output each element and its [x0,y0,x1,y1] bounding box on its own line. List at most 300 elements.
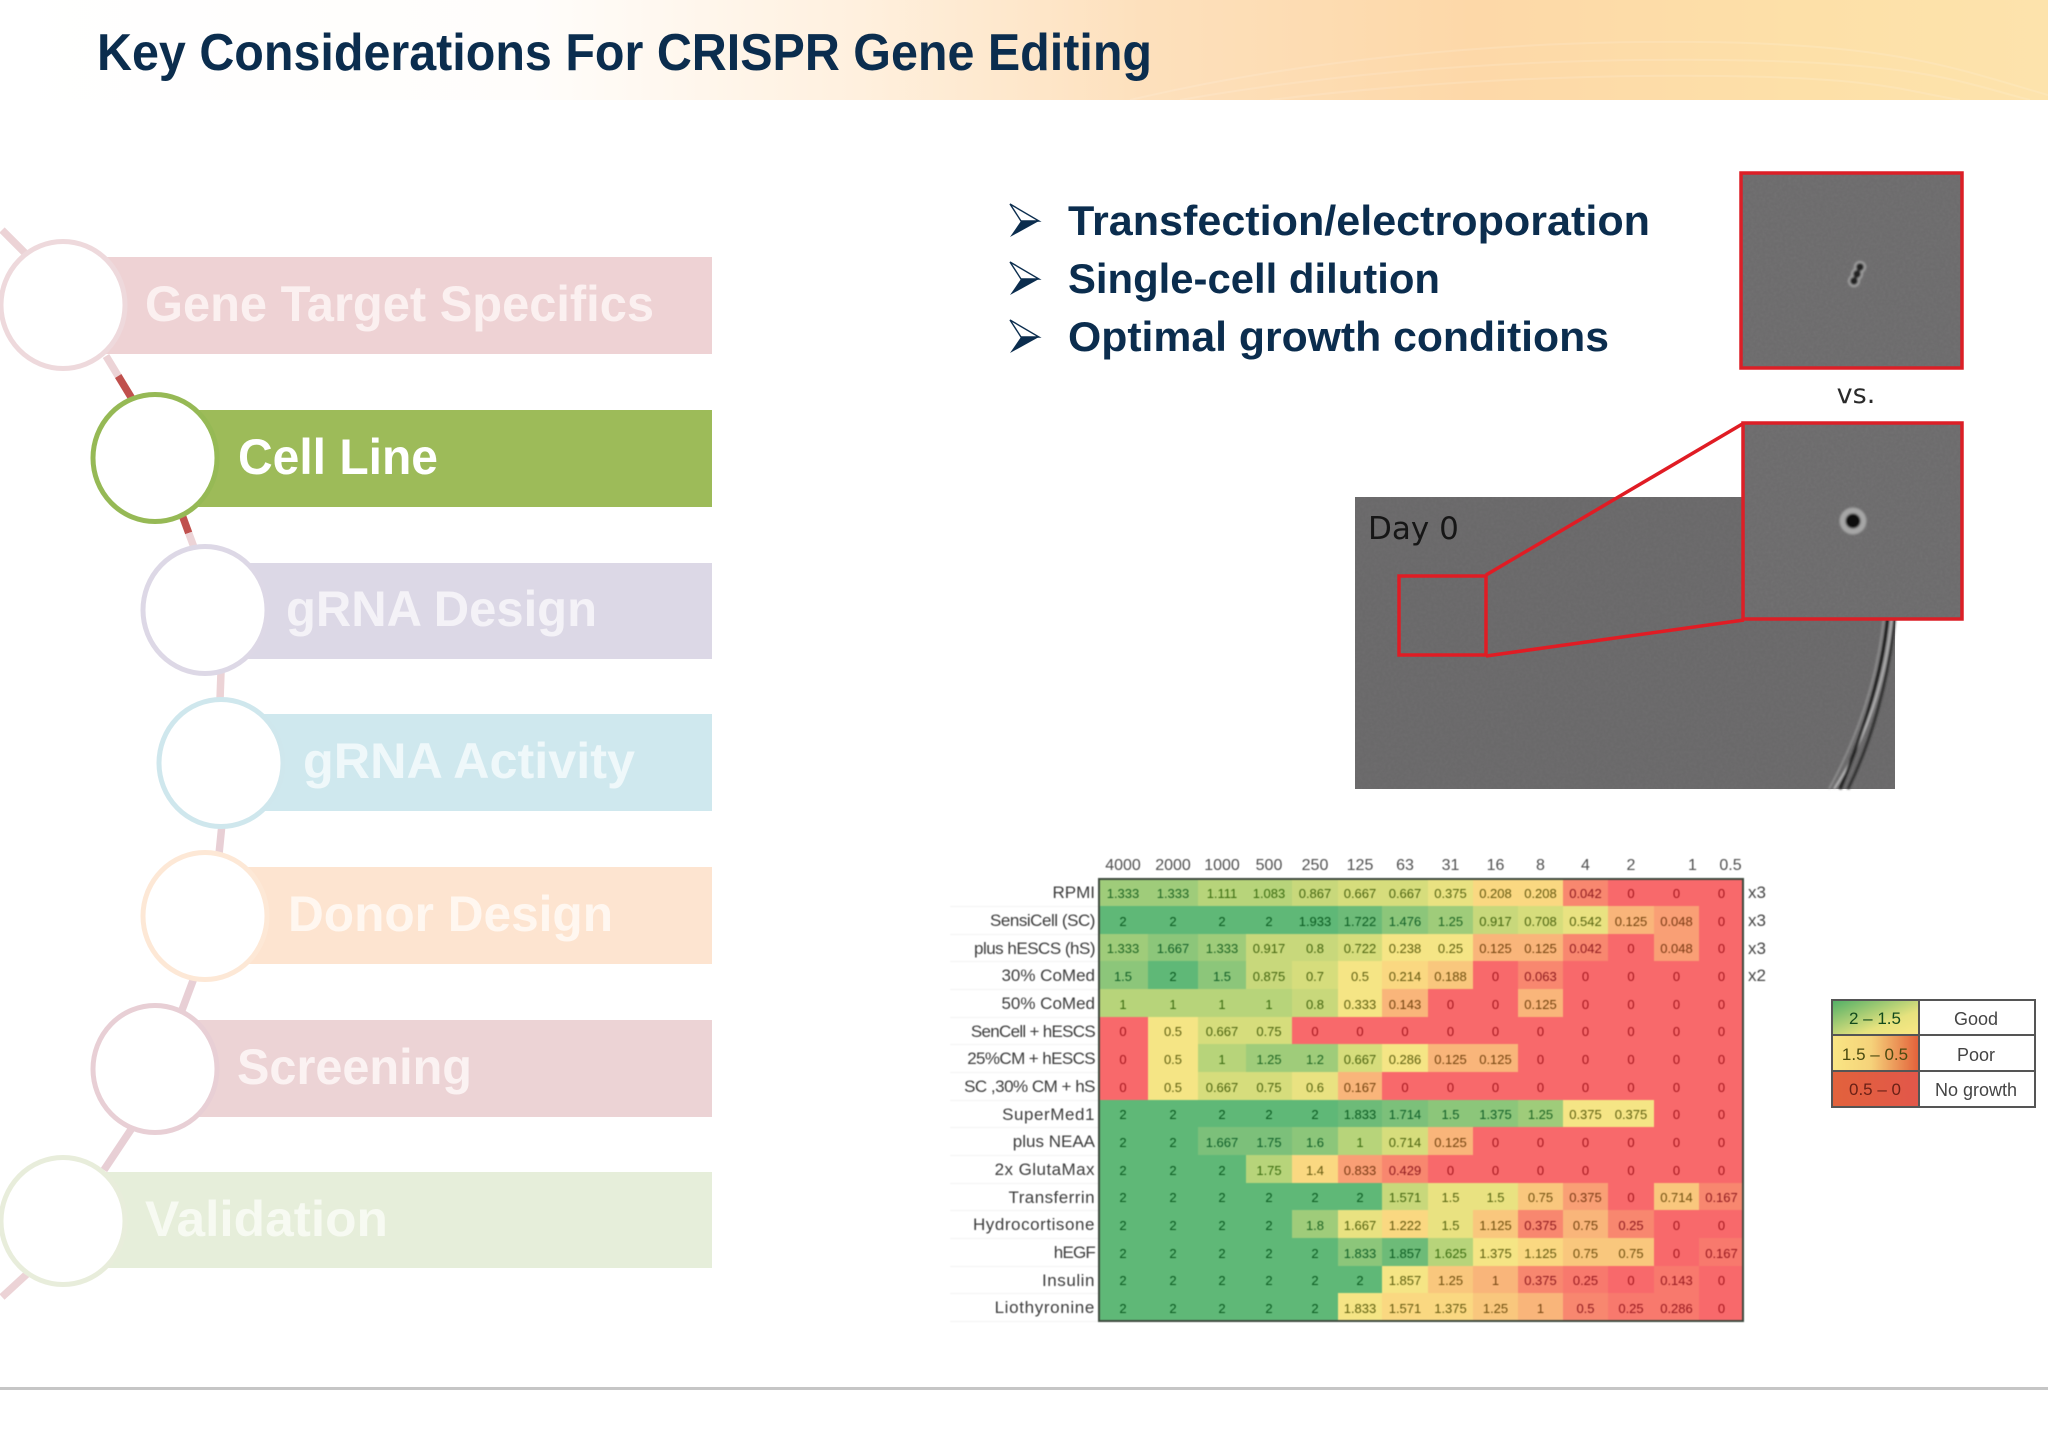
heat map table: 1.125 [1479,1218,1512,1232]
step: Gene Target Specifics [1,242,712,368]
legend labels: Good [1954,1009,1998,1029]
heat map table: 0 [1718,1162,1725,1178]
heat map table: 1.375 [1434,1300,1467,1316]
heat map table: 2 [1218,1273,1226,1288]
heat map table: 0.875 [1253,968,1285,984]
heat map table: 1.333 [1157,886,1189,900]
heat map table: 1.2 [1306,1052,1324,1066]
heat map table: 0 [1673,1218,1680,1232]
heat map table: 2 [1169,1246,1177,1260]
heat map table: 1.833 [1344,1107,1376,1122]
heat map table: x3 [1748,911,1766,930]
step: Cell Line [93,394,712,522]
heat map table: 2 [1218,1218,1226,1232]
heat map table: 0.286 [1389,1052,1421,1066]
heat map table: 1.333 [1206,941,1238,956]
colony edge arcs [1829,615,1895,789]
microscopy: single cell [1743,423,1962,619]
legend labels: 2 – 1.5 [1849,1009,1901,1028]
heat map table: 4000 [1105,856,1141,874]
heat map table: 0 [1718,996,1725,1012]
footer rule [0,1387,2048,1390]
heat map table: 0 [1582,968,1589,984]
heat map table: 0.917 [1479,914,1512,928]
heat map table: 0.75 [1256,1024,1282,1039]
heat map table: 0.917 [1253,941,1285,956]
heat map table: 0 [1492,968,1499,984]
heat map table: 0.8 [1306,941,1324,956]
heat map table: 0.667 [1206,1024,1238,1039]
heat map table: 0.048 [1660,914,1693,928]
heat map table: 0.75 [1573,1218,1598,1232]
heat map table: 0.375 [1615,1107,1647,1122]
heat map table: 0 [1447,1080,1454,1094]
heat map table: 1.5 [1213,968,1231,984]
heat map table: 0 [1673,1107,1680,1122]
step: Cell Line: Cell Line [238,429,438,485]
heat map table: 2 [1119,1162,1127,1178]
heat map table: 1 [1537,1300,1544,1316]
heat map table: 2000 [1155,856,1191,874]
heat map table: 0 [1401,1080,1409,1094]
heat map table: 0 [1356,1024,1364,1039]
heat map table: 1.8 [1306,1218,1324,1232]
heat map table: 0.708 [1524,914,1557,928]
heat map table: 1 [1356,1134,1364,1150]
heat map table: 1.75 [1256,1162,1282,1178]
heat map table: 0.5 [1576,1300,1595,1316]
heat map table: 0.714 [1389,1134,1421,1150]
heat map table: 0 [1718,886,1725,900]
heat map table: 30% CoMed [1001,966,1095,985]
step: Donor Design: Donor Design [288,886,613,942]
heat map table: 1.722 [1344,914,1376,928]
heat map table: 1.667 [1344,1218,1376,1232]
heat map table: Transferrin [1008,1188,1095,1206]
step: Screening [93,1006,712,1132]
heat map table: 63 [1396,856,1414,874]
heat map table: 1.4 [1306,1162,1324,1178]
heat map table: 1.111 [1207,886,1237,900]
heat map table: 2 [1218,1246,1226,1260]
heat map table: 2 [1119,1134,1127,1150]
heat map table: 0 [1718,1273,1725,1288]
heat map table: 1.667 [1206,1134,1238,1150]
heat map table: 0.429 [1389,1162,1421,1178]
heat map table: 250 [1302,856,1328,874]
heat map table: SC ,30% CM + hS [964,1077,1095,1096]
heat map table: 0 [1627,941,1635,956]
heat map table: Hydrocortisone [973,1215,1095,1234]
heat map table: 1.5 [1441,1107,1460,1122]
heat map table: 2 [1356,1273,1364,1288]
heat map table: 16 [1487,856,1504,874]
heat map table: 0.125 [1524,996,1557,1012]
heat map table: 0 [1673,1162,1680,1178]
heat map table: 1.571 [1389,1300,1421,1316]
heat map table: 0 [1673,1052,1680,1066]
heat map table: 0.667 [1344,886,1376,900]
heat map table: 0.667 [1344,1052,1376,1066]
step: Validation: Validation [145,1191,388,1247]
heat map table: 0 [1582,1052,1589,1066]
heat map table: 1.5 [1441,1190,1460,1205]
heat map table: 1.625 [1434,1246,1467,1260]
heat map table: 2 [1119,1190,1127,1205]
heat map table: 0 [1401,1024,1409,1039]
heat map table: 1 [1119,996,1127,1012]
heat map table: Insulin [1042,1270,1095,1290]
legend grid [1832,1000,2035,1107]
heat map table: 0 [1582,1080,1589,1094]
heat map table: 1.25 [1528,1107,1553,1122]
heat map table: 2 [1627,856,1635,874]
heat map table: 0.125 [1434,1134,1467,1150]
heat map table: 2 [1265,1107,1273,1122]
heat map table: 0.5 [1351,968,1369,984]
heat map table: 0 [1627,968,1635,984]
heat map table: 0 [1537,1134,1544,1150]
heat map table: 0 [1673,968,1680,984]
heat map table: 2 [1218,1162,1226,1178]
heat map table: 0.5 [1164,1024,1182,1039]
legend labels: Poor [1957,1045,1995,1065]
heat map table: 2 [1119,1246,1127,1260]
heat map table: 31 [1442,856,1459,874]
heat map table: 1.125 [1524,1246,1557,1260]
heat map table: 0.833 [1344,1162,1376,1178]
heat map table: 2 [1265,1300,1273,1316]
heat map table: 0.5 [1164,1052,1182,1066]
heat map table: 0 [1718,941,1725,956]
heat map table: x2 [1748,966,1766,985]
title: Key Considerations For CRISPR Gene Editing [97,24,1152,82]
heat map table: 0 [1718,914,1725,928]
heat map table: 2 [1119,1273,1127,1288]
legend [1832,1000,2035,1107]
heat map table: 2 [1169,1273,1177,1288]
step: gRNA Activity: gRNA Activity [303,733,635,789]
heat map table: plus hESCS (hS) [974,938,1095,958]
heat map table: 50% CoMed [1001,994,1095,1013]
heat map table: 0 [1447,1162,1454,1178]
heat map table: 2 [1119,1218,1127,1232]
heat map table: 0 [1537,1052,1544,1066]
heat map table: 0.25 [1618,1218,1644,1232]
heat map table: 1.25 [1438,914,1463,928]
heat map table: 1.222 [1389,1218,1421,1232]
heat map table: 2 [1169,1300,1177,1316]
heat map table: 0 [1627,1052,1635,1066]
heat map table: 2 [1218,1107,1226,1122]
heat map table: 0 [1718,1107,1725,1122]
heat map table: 2 [1169,914,1177,928]
heat map table: 8 [1536,856,1545,874]
heat map table: 0.7 [1306,968,1324,984]
step: gRNA Design [143,546,712,674]
heat map table: 0.8 [1306,996,1324,1012]
vs label: vs. [1837,379,1875,410]
heat map table: RPMI [1052,883,1095,902]
heat map table: 0.125 [1479,941,1512,956]
heat map table: 0.167 [1344,1080,1376,1094]
step: Gene Target Specifics: Gene Target Specifics [145,276,654,332]
heat map table: 2 [1218,914,1226,928]
heat map table: 0.143 [1660,1273,1693,1288]
heat map table: 0 [1627,886,1635,900]
heat map table: 0.125 [1524,941,1557,956]
heat map table: 0 [1627,1273,1635,1288]
heat map table: 0.125 [1479,1052,1512,1066]
heat map table: 1.333 [1107,941,1139,956]
heat map table: 1.5 [1114,968,1132,984]
heat map table: 0.6 [1306,1080,1324,1094]
microscopy: day 0 field [1355,497,1895,789]
heat map table: 0.063 [1524,968,1557,984]
heat map table: 0 [1537,1162,1544,1178]
heat map table: 0.75 [1618,1246,1644,1260]
heat map table: 0 [1627,1190,1635,1205]
heat map table: 0 [1582,1134,1589,1150]
heat map table: 1.375 [1479,1107,1512,1122]
heat map table: 0 [1492,1134,1499,1150]
heat map table: 1.857 [1389,1273,1421,1288]
heat map table: 0.75 [1256,1080,1282,1094]
heat map table: 2 [1169,1162,1177,1178]
heat map table: 0 [1447,996,1454,1012]
red selection box [1399,576,1486,655]
heat map table: 1.667 [1157,941,1189,956]
heat map table: 0.75 [1573,1246,1598,1260]
bullet list [1010,197,1650,360]
legend labels: 1.5 – 0.5 [1842,1045,1908,1064]
heat map table: 1.25 [1256,1052,1282,1066]
heat map table: 2 [1169,1134,1177,1150]
legend swatches [1832,1000,1919,1107]
heat map table: 0.208 [1524,886,1557,900]
heat map table: 0 [1311,1024,1319,1039]
heat map table: 0 [1492,1024,1499,1039]
heat map table: 1.933 [1299,914,1331,928]
heat map table: 0 [1673,1246,1680,1260]
heat map table: 2 [1119,1300,1127,1316]
heat map table: 0 [1492,1080,1499,1094]
heat map table: 2 [1265,914,1273,928]
heat map table: 1 [1688,856,1697,874]
heat map table [964,856,1766,1323]
heat map table: 0.5 [1164,1080,1182,1094]
heat map table: 0 [1718,1218,1725,1232]
heat map table: 0 [1537,1080,1544,1094]
heat map table: 2 [1218,1300,1226,1316]
heat map table: 2x GlutaMax [995,1160,1095,1179]
heat map table: 1.5 [1441,1218,1460,1232]
heat map table: 0.375 [1524,1273,1557,1288]
heat map table: 0.25 [1438,941,1463,956]
heat map table: 1.25 [1438,1273,1463,1288]
zoom lines [1486,423,1744,656]
heat map table: 0 [1718,968,1725,984]
heat map table: 0.375 [1434,886,1467,900]
heat map table: Liothyronine [995,1298,1095,1317]
heat map table: 0.667 [1206,1080,1238,1094]
heat map table: 2 [1169,1218,1177,1232]
day label: Day 0 [1368,511,1459,547]
heat map table: 0 [1119,1052,1127,1066]
heat map table: 1.75 [1256,1134,1282,1150]
heat map table: 2 [1218,1190,1226,1205]
heat map table: 0.667 [1389,886,1421,900]
heat map table: 0 [1718,1052,1725,1066]
bullet: transfection: Transfection/electroporation [1068,197,1650,244]
heat map table: 0 [1492,1162,1499,1178]
heat map table: 0 [1673,1024,1680,1039]
heat map table: 0 [1492,996,1499,1012]
heat map table: 0.375 [1569,1107,1602,1122]
heat map table: 2 [1311,1300,1319,1316]
heat map table: 0.143 [1389,996,1421,1012]
heat map table: 0 [1627,996,1635,1012]
heat map table: 1.25 [1483,1300,1508,1316]
heat map table: 0 [1627,1024,1635,1039]
heat map table: 4 [1581,856,1590,874]
heat map table: 0 [1673,1134,1680,1150]
heat map table: 0.167 [1705,1190,1738,1205]
heat map table: plus NEAA [1013,1132,1095,1151]
step: Screening: Screening [237,1039,472,1095]
heat map table: 1.6 [1306,1134,1324,1150]
heat map table: 1.857 [1389,1246,1421,1260]
heat map table: 1.833 [1344,1300,1376,1316]
heat map table: 0.214 [1389,968,1421,984]
heat map table: 0.333 [1344,996,1376,1012]
bullet: single-cell dilution: Single-cell dilution [1068,255,1440,302]
heat map table: 1 [1218,996,1226,1012]
heat map table: 2 [1265,1190,1273,1205]
heat map table: hEGF [1054,1243,1095,1262]
heat map table: 0 [1673,886,1680,900]
heat map table: 2 [1119,914,1127,928]
heat map table: x3 [1748,883,1766,902]
legend labels: 0.5 – 0 [1849,1080,1901,1099]
heat map table: 1 [1492,1273,1499,1288]
heat map table: 1.571 [1389,1190,1421,1205]
heat map table: 0 [1718,1024,1725,1039]
heat map table: 1.833 [1344,1246,1376,1260]
heat map table: SuperMed1 [1002,1104,1095,1124]
heat map table: 1 [1169,996,1177,1012]
heat map table: 0.375 [1524,1218,1557,1232]
heat map table: 2 [1169,1107,1177,1122]
heat map table: 0.75 [1528,1190,1553,1205]
heat map table: 0 [1582,1024,1589,1039]
heat map table: 2 [1356,1190,1364,1205]
heat map table: 0.208 [1479,886,1512,900]
step: gRNA Activity [159,700,712,826]
heat map table: 0.714 [1660,1190,1693,1205]
heat map table: 0 [1673,996,1680,1012]
heat map table: 0 [1718,1134,1725,1150]
heat map table: 0 [1718,1080,1725,1094]
heat map table: 2 [1169,968,1177,984]
heat map table: 2 [1265,1246,1273,1260]
heat map table: 0 [1582,1162,1589,1178]
heat map table: 2 [1311,1190,1319,1205]
heat map table: 0.286 [1660,1300,1693,1316]
heat map table: 0 [1119,1080,1127,1094]
heat map table: 0 [1627,1080,1635,1094]
heat map table: 0.542 [1569,914,1602,928]
heat map table: 0 [1447,1024,1454,1039]
microscopy: clump of cells [1741,173,1962,368]
heat map table: 2 [1265,1273,1273,1288]
heat map table: 500 [1256,856,1282,874]
heat map table: 0 [1537,1024,1544,1039]
heat map table: 2 [1311,1246,1319,1260]
heat map table: 0.25 [1573,1273,1598,1288]
panel: process steps [1,230,712,1297]
heat map table: 1 [1265,996,1273,1012]
heat map table: 0.167 [1705,1246,1738,1260]
heat map table: 0.042 [1569,941,1602,956]
heat map table: 2 [1265,1218,1273,1232]
heat map table: 1.476 [1389,914,1421,928]
heat map table: 0 [1673,1080,1680,1094]
heat map table: 1000 [1204,856,1240,874]
heat map table: SenCell + hESCS [971,1022,1095,1040]
heat map table: SensiCell (SC) [990,911,1095,930]
heat map table: 1.375 [1479,1246,1512,1260]
heat map table: 1.5 [1486,1190,1505,1205]
heat map table: 0.5 [1719,856,1742,874]
legend labels [1842,1009,2017,1100]
heat map table: 25%CM + hESCS [967,1049,1095,1068]
heat map table: 1.714 [1389,1107,1421,1122]
heat map table: 1.083 [1253,886,1285,900]
heat map table: 0.375 [1569,1190,1602,1205]
heat map table: 2 [1119,1107,1127,1122]
heat map table: 0 [1718,1300,1725,1316]
heat map table: 0.25 [1618,1300,1644,1316]
heat map table: 1 [1218,1052,1226,1066]
heat map table: 0.722 [1344,941,1376,956]
heat map table: 125 [1347,856,1373,874]
heat map table: 0 [1119,1024,1127,1039]
heat map table: 0 [1582,996,1589,1012]
heat map table: 0.238 [1389,941,1421,956]
heat map table: 0 [1627,1162,1635,1178]
heat map table: 0.125 [1615,914,1647,928]
heat map table: 0.125 [1434,1052,1467,1066]
step: Donor Design [143,852,712,980]
bullet: optimal growth: Optimal growth conditions [1068,313,1609,360]
heat map table: 2 [1311,1273,1319,1288]
heat map table: 2 [1169,1190,1177,1205]
heat map table: 0.042 [1569,886,1602,900]
heat map table: x3 [1748,938,1766,958]
heat map table: 0.048 [1660,941,1693,956]
step: Validation [1,1158,712,1284]
heat map table: 2 [1311,1107,1319,1122]
step: gRNA Design: gRNA Design [286,581,597,637]
heat map table: 0 [1627,1134,1635,1150]
legend labels: No growth [1935,1080,2017,1100]
connector path [2,230,222,1297]
heat map table: 1.333 [1107,886,1139,900]
heat map table: 0.188 [1434,968,1467,984]
header banner [0,0,2048,100]
heat map table: 0.867 [1299,886,1331,900]
